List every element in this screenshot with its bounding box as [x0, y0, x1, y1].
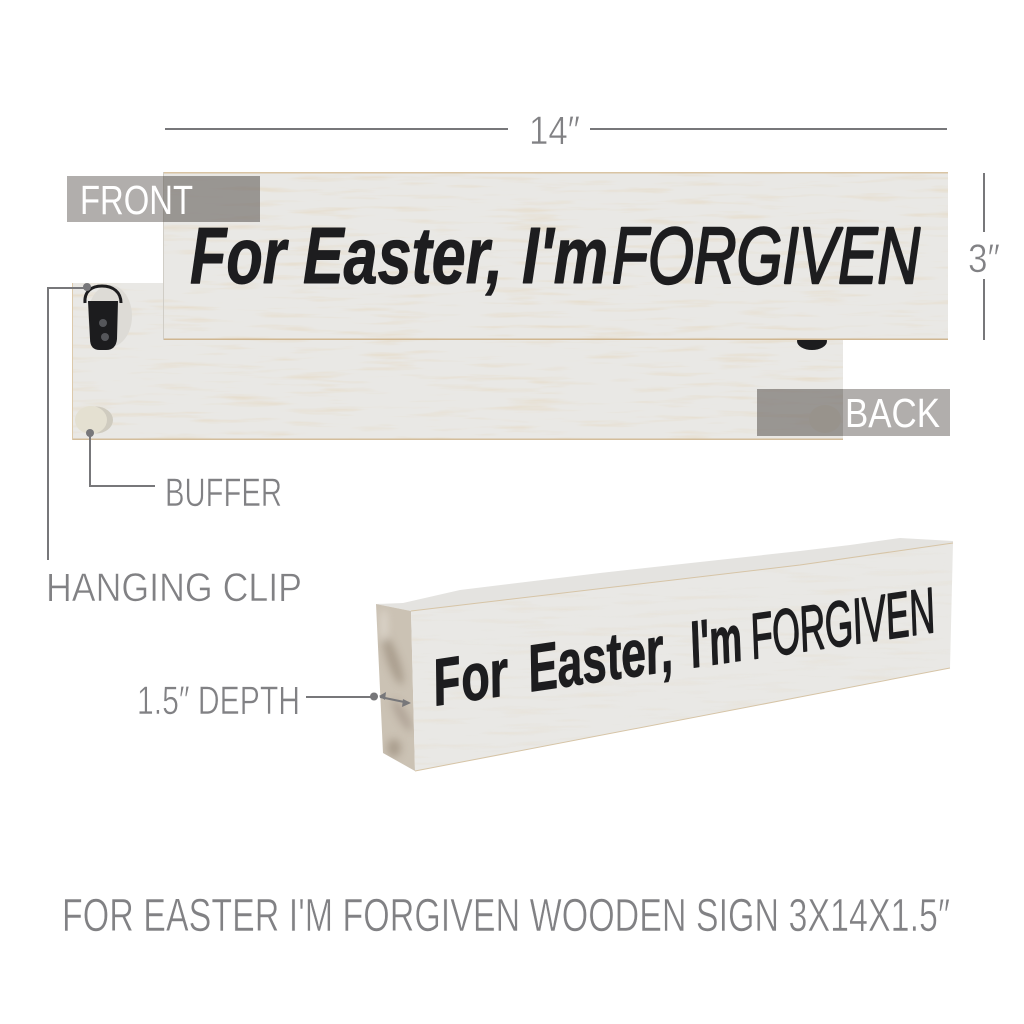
dimension: height 3 inches: 3″ — [968, 237, 1000, 281]
callout: hanging clip: HANGING CLIP — [46, 566, 302, 610]
label: BACK: BACK — [845, 390, 940, 436]
sign lettering: front — [190, 211, 920, 300]
panel: front view of sign — [163, 172, 948, 340]
sign lettering: front: FORGIVEN — [612, 211, 920, 300]
dimension: width 14 inches: 14″ — [529, 109, 580, 153]
callout: hanging clip — [46, 283, 302, 610]
label: FRONT: FRONT — [80, 177, 193, 223]
sign lettering: angled: Easter, — [522, 611, 677, 705]
front face — [411, 543, 953, 771]
top face — [376, 538, 953, 611]
icon: buffer right — [809, 405, 841, 433]
icon: hanging clip — [85, 285, 132, 350]
sign lettering: front: Easter, — [303, 211, 503, 300]
icon: black bump — [797, 332, 827, 350]
sign lettering: angled: I'm — [684, 601, 747, 681]
callout: buffer — [86, 429, 282, 515]
callout: depth: 1.5″ DEPTH — [137, 679, 300, 723]
label: BACK — [757, 389, 950, 436]
sign lettering: front: I'm — [522, 211, 608, 300]
sign lettering: angled — [427, 572, 940, 719]
sign lettering: front: For — [190, 211, 289, 300]
icon: buffer left — [75, 406, 113, 434]
callout: buffer: BUFFER — [165, 471, 282, 515]
end grain face — [376, 604, 415, 771]
panel: back view of sign — [72, 283, 843, 440]
sign lettering: angled: For — [427, 635, 515, 719]
panel: angled view of sign — [376, 538, 953, 771]
